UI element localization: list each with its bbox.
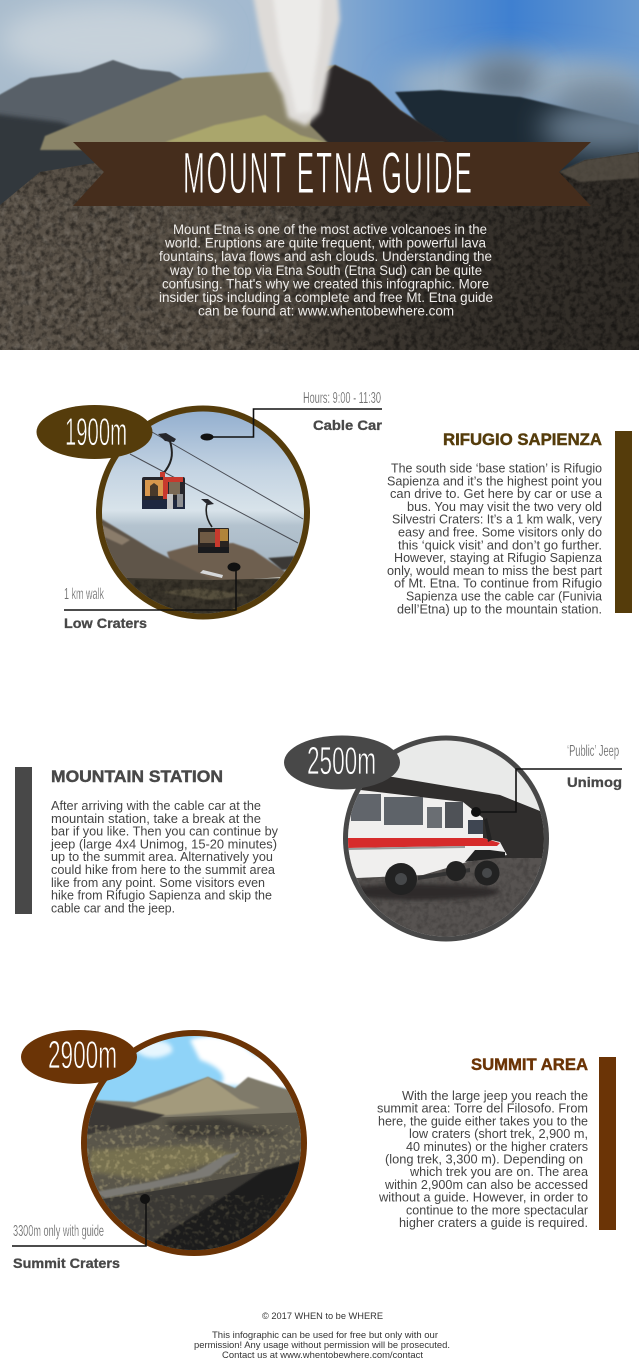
altitude badge: 2900m — [21, 1030, 137, 1084]
intro text: can be found at: www.whentobewhere.com — [198, 304, 454, 319]
panel: Mountain Station: like from any point. Some visitors even — [51, 876, 265, 890]
cable car cabin upper — [142, 433, 185, 509]
panel: Rifugio Sapienza: RIFUGIO SAPIENZA — [443, 431, 602, 449]
footer: This infographic can be used for free but only with our — [212, 1330, 438, 1341]
panel: Mountain Station: mountain station, take a break at the — [51, 812, 261, 826]
photo circle: summit area — [12, 1030, 310, 1271]
panel: Rifugio Sapienza: bus. You may visit the two very old — [407, 500, 602, 514]
leader: Cable Car: Cable Car — [313, 417, 383, 433]
panel: Mountain Station: MOUNTAIN STATION — [51, 768, 223, 786]
panel: Rifugio Sapienza: dell’Etna) up to the mountain station. — [397, 602, 602, 616]
leader: Low Craters: 1 km walk — [64, 586, 105, 603]
panel: Rifugio Sapienza: easy and free. Some visitors only do — [398, 526, 602, 540]
leader: Summit Craters: 3300m only with guide — [13, 1223, 104, 1240]
panel: Summit Area: SUMMIT AREA — [471, 1056, 588, 1074]
panel: Summit Area: higher craters a guide is required. — [399, 1216, 588, 1230]
title: MOUNT ETNA GUIDE — [183, 140, 472, 206]
leader: Summit Craters — [12, 1194, 150, 1271]
panel: Summit Area: 40 minutes) or the higher craters — [406, 1140, 588, 1154]
intro text: fountains, lava flows and ash clouds. Understanding the — [159, 249, 492, 264]
smoke plume — [252, 0, 340, 126]
panel: Rifugio Sapienza: this ‘quick visit’ and don’t go further. — [398, 538, 602, 552]
panel: Rifugio Sapienza: However, staying at Rifugio Sapienza — [394, 551, 602, 565]
panel: Mountain Station: up to the summit area. Alternatively you — [51, 850, 273, 864]
leader: Low Craters — [64, 562, 240, 631]
intro text: way to the top via Etna South (Etna Sud) can be quite — [169, 263, 482, 278]
panel: Summit Area: without a guide. However, in order to — [378, 1191, 588, 1205]
panel: Rifugio Sapienza: Sapienza and it’s the highest point you — [387, 474, 602, 488]
altitude badge: 2500m: 2500m — [307, 740, 376, 783]
leader: Summit Craters: Summit Craters — [13, 1255, 120, 1271]
leader: Cable Car: Hours: 9:00 - 11:30 — [303, 390, 381, 407]
wheels — [385, 863, 417, 895]
panel: Rifugio Sapienza: can drive to. Get here by car or use a — [390, 487, 602, 501]
panel: Mountain Station: cable car and the jeep. — [51, 901, 175, 915]
intro text: Mount Etna is one of the most active volcanoes in the — [173, 222, 487, 237]
panel: Mountain Station: bar if you like. Then you can continue by — [51, 825, 279, 839]
leader: Unimog: Unimog — [567, 774, 622, 790]
panel: Rifugio Sapienza: of Mt. Etna. To continue from Rifugio — [394, 577, 602, 591]
footer — [194, 1311, 450, 1361]
photo circle: Unimog jeep — [284, 735, 622, 948]
footer: © 2017 WHEN to be WHERE — [262, 1311, 383, 1322]
panel: Summit Area: within 2,900m can also be accessed — [384, 1178, 588, 1192]
panel: Rifugio Sapienza: Silvestri Craters: It’s a 1 km walk, very — [392, 513, 603, 527]
altitude badge: 1900m: 1900m — [65, 411, 127, 454]
intro text: world. Eruptions are quite frequent, with powerful lava — [164, 236, 486, 251]
cable car cabin lower — [198, 499, 229, 553]
panel: Rifugio Sapienza — [387, 431, 632, 616]
panel: Summit Area: here, the guide either takes you to the — [378, 1114, 588, 1128]
panel: Summit Area: low craters (short trek, 2,900 m, — [409, 1127, 588, 1141]
title banner — [73, 140, 591, 206]
panel: Summit Area — [377, 1056, 616, 1230]
panel: Summit Area: (long trek, 3,300 m). Depending on — [385, 1152, 583, 1166]
panel: Mountain Station — [15, 767, 279, 915]
panel: Mountain Station: hike from Rifugio Sapienza and skip the — [51, 889, 272, 903]
bus — [345, 789, 507, 895]
footer: Contact us at www.whentobewhere.com/contact — [222, 1350, 423, 1361]
panel: Summit Area: summit area: Torre del Filosofo. From — [377, 1102, 588, 1116]
intro text: confusing. That's why we created this infographic. More — [162, 276, 489, 291]
panel: Summit Area: which trek you are on. The area — [409, 1165, 588, 1179]
intro text: insider tips including a complete and free Mt. Etna guide — [159, 290, 493, 305]
panel: Rifugio Sapienza: only, would mean to miss the best part — [387, 564, 603, 578]
panel: Summit Area: continue to the more spectacular — [406, 1203, 588, 1217]
intro text — [159, 222, 493, 319]
footer: permission! Any usage without permission will be prosecuted. — [194, 1340, 450, 1351]
altitude badge: 2900m: 2900m — [48, 1034, 117, 1077]
altitude badge: 1900m — [36, 405, 152, 459]
header photo: Etna crater — [0, 0, 639, 350]
photo circle: cable car — [36, 390, 383, 631]
leader: Cable Car — [200, 390, 383, 440]
leader: Unimog — [471, 743, 622, 817]
panel: Rifugio Sapienza: The south side ‘base station’ is Rifugio — [391, 462, 602, 476]
panel: Summit Area: With the large jeep you reach the — [402, 1089, 588, 1103]
panel: Rifugio Sapienza: Sapienza use the cable car (Funivia — [406, 590, 602, 604]
panel: Mountain Station: jeep (large 4x4 Unimog, 15-20 minutes) — [50, 837, 277, 851]
panel: Mountain Station: could hike from here to the summit area — [51, 863, 275, 877]
panel: Mountain Station: After arriving with the cable car at the — [51, 799, 261, 813]
altitude badge: 2500m — [284, 736, 400, 790]
leader: Low Craters: Low Craters — [64, 615, 147, 631]
